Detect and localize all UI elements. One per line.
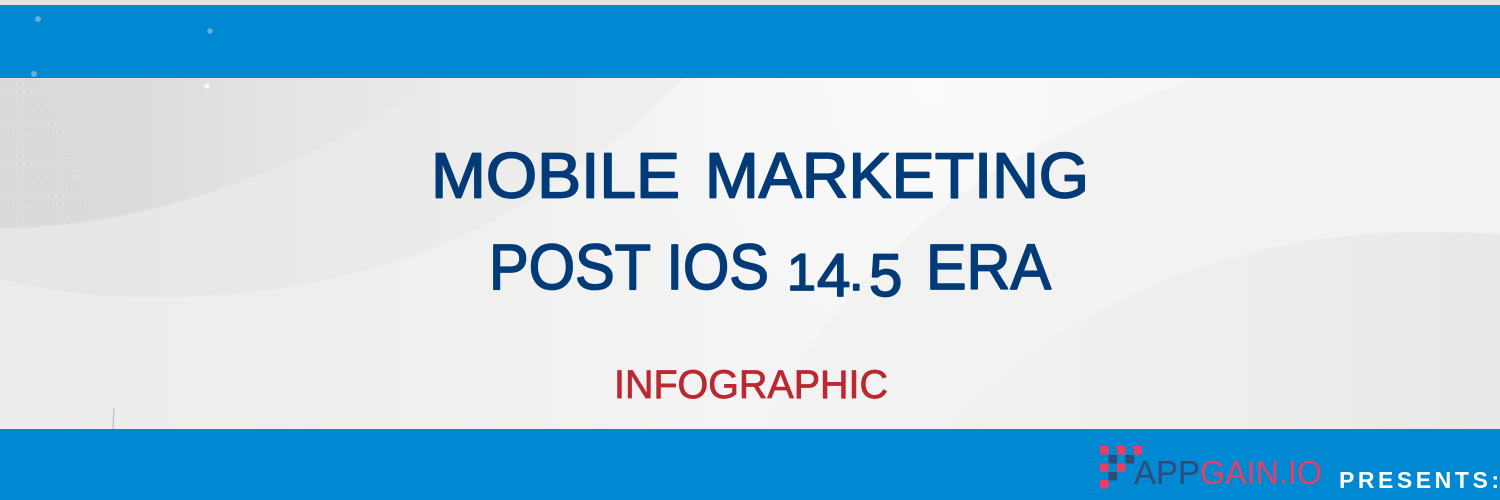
- title: MARKETING: [705, 140, 1089, 212]
- title: 4: [817, 242, 850, 309]
- title: 5: [869, 242, 902, 309]
- logo wordmark: [1134, 454, 1322, 491]
- presents label: PRESENTS:: [1339, 467, 1499, 493]
- logo wordmark: GAIN.IO: [1200, 454, 1322, 491]
- bottom blue band: [0, 429, 1500, 500]
- top blue band: [0, 5, 1500, 78]
- icon: pixel squares: [1100, 446, 1142, 488]
- title: 1: [787, 244, 816, 302]
- title: ERA: [926, 231, 1051, 303]
- logo: appgain.io: [1100, 446, 1322, 491]
- title: [431, 140, 1089, 309]
- title: POST IOS: [489, 231, 769, 303]
- subtitle: INFOGRAPHIC: [614, 363, 888, 407]
- top light strip: [0, 0, 1500, 5]
- title: .: [849, 244, 863, 302]
- small blue tick mark: [113, 408, 114, 429]
- logo wordmark: APP: [1134, 454, 1200, 491]
- decorative dots: [31, 16, 213, 89]
- title: MOBILE: [431, 140, 680, 212]
